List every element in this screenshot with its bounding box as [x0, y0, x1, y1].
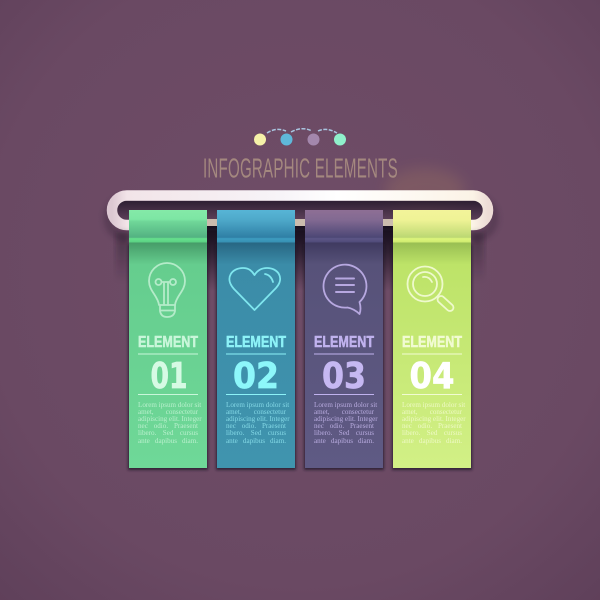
- shadows between strips: [116, 226, 484, 291]
- body text 01: [138, 400, 202, 445]
- strip: blue: [216, 210, 296, 470]
- lime body: [393, 242, 471, 468]
- icon: light bulb: [149, 263, 185, 317]
- icon: magnifying glass: [408, 266, 455, 312]
- warm glow near rail: [385, 168, 465, 212]
- body text 02: ante dapibus diam.: [226, 437, 286, 445]
- number 04: 04: [410, 356, 454, 397]
- purple body: [305, 242, 383, 468]
- body text 01: nec odio. Praesent: [138, 422, 198, 430]
- body text 04: amet, consectetur: [402, 408, 462, 416]
- body text 01: libero. Sed cursus: [138, 429, 198, 437]
- number 01: 01: [150, 356, 188, 397]
- body text 03: libero. Sed cursus: [314, 429, 374, 437]
- number 03: 03: [322, 356, 366, 397]
- heading: element 03: ELEMENT: [314, 334, 374, 351]
- body text 04: nec odio. Praesent: [402, 422, 462, 430]
- heading: element 01: ELEMENT: [138, 334, 198, 351]
- lime fold: [393, 210, 471, 242]
- blue fold: [217, 210, 295, 242]
- body text 04: Lorem ipsum dolor sit: [402, 400, 465, 408]
- icon: speech bubble: [323, 265, 366, 314]
- number 02: 02: [233, 356, 279, 397]
- body text 04: [402, 400, 466, 445]
- strip: purple: [304, 210, 384, 470]
- body text 02: nec odio. Praesent: [226, 422, 286, 430]
- body text 01: Lorem ipsum dolor sit: [138, 400, 201, 408]
- body text 03: amet, consectetur: [314, 408, 374, 416]
- body text 03: nec odio. Praesent: [314, 422, 374, 430]
- strip: green: [128, 210, 208, 470]
- body text 03: Lorem ipsum dolor sit: [314, 400, 377, 408]
- body text 02: amet, consectetur: [226, 408, 286, 416]
- body text 01: adipiscing elit. Integer: [138, 415, 202, 423]
- body text 03: ante dapibus diam.: [314, 437, 374, 445]
- body text 02: Lorem ipsum dolor sit: [226, 400, 289, 408]
- body text 03: adipiscing elit. Integer: [314, 415, 378, 423]
- green body: [129, 242, 207, 468]
- green fold: [129, 210, 207, 242]
- body text 03: [314, 400, 378, 445]
- blue body: [217, 242, 295, 468]
- body text 02: [226, 400, 290, 445]
- title: INFOGRAPHIC ELEMENTS: [203, 153, 398, 184]
- body text 02: libero. Sed cursus: [226, 429, 286, 437]
- hanging rail: [108, 196, 494, 237]
- body text 04: ante dapibus diam.: [402, 437, 462, 445]
- strip: lime: [392, 210, 472, 470]
- body text 01: ante dapibus diam.: [138, 437, 198, 445]
- body text 04: adipiscing elit. Integer: [402, 415, 466, 423]
- icon: heart: [229, 268, 280, 310]
- heading: element 02: ELEMENT: [226, 334, 286, 351]
- heading: element 04: ELEMENT: [402, 334, 462, 351]
- purple fold: [305, 210, 383, 242]
- body text 01: amet, consectetur: [138, 408, 198, 416]
- connected dots ornament: [254, 129, 346, 146]
- body text 04: libero. Sed cursus: [402, 429, 462, 437]
- body text 02: adipiscing elit. Integer: [226, 415, 290, 423]
